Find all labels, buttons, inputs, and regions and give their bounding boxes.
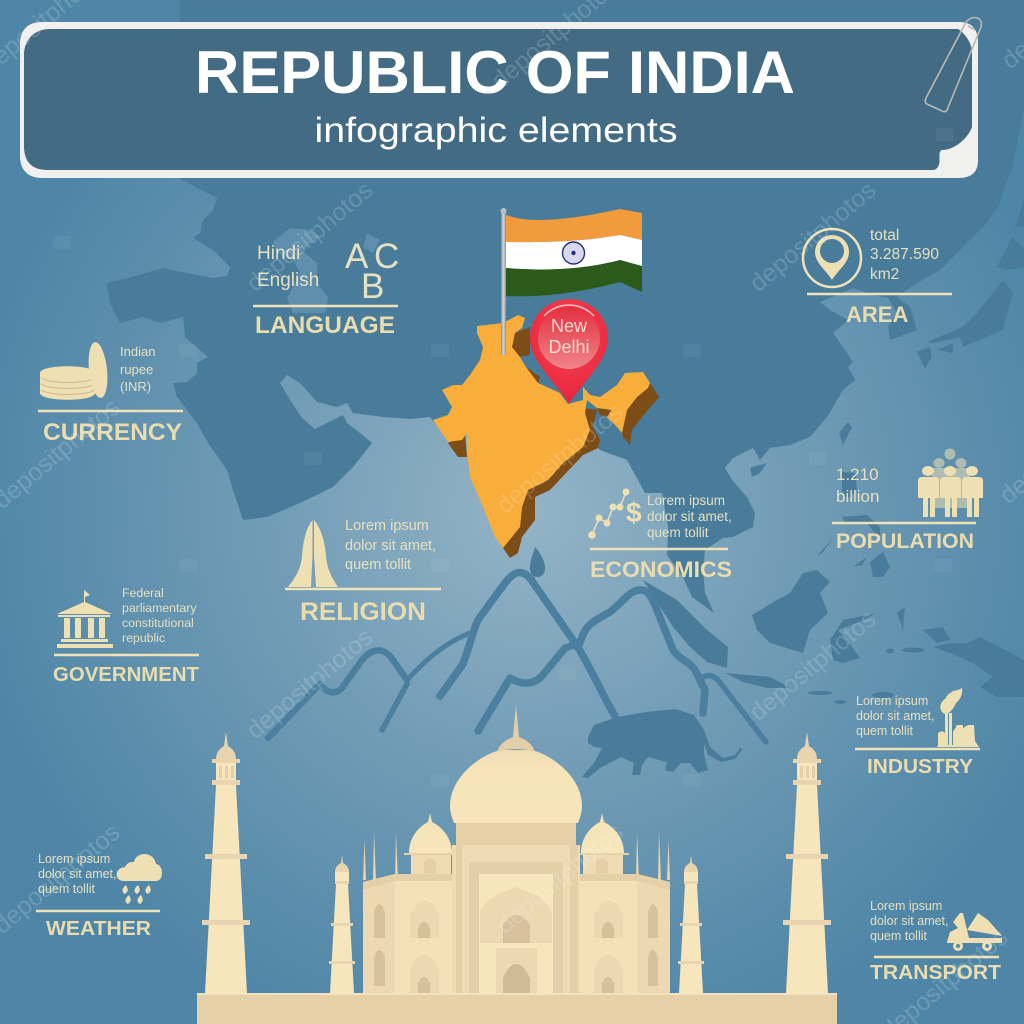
Sulawesi	[830, 613, 877, 663]
spires	[363, 832, 670, 880]
icon: parliament building	[57, 590, 113, 648]
currency block	[38, 341, 183, 446]
weather block: WEATHER	[46, 918, 152, 940]
Taj Mahal	[197, 705, 837, 1024]
government block: constitutional	[122, 616, 194, 630]
watermarks: depositphotos	[241, 623, 378, 745]
pin: New Delhi	[530, 299, 608, 404]
camera watermark marks	[53, 128, 954, 787]
Japan	[917, 200, 1024, 368]
industry block	[855, 688, 980, 778]
currency block: CURRENCY	[43, 419, 182, 446]
population block: 1.210	[836, 465, 879, 484]
area block	[803, 227, 952, 327]
transport block: quem tollit	[870, 929, 927, 943]
east coast relief	[503, 408, 600, 558]
population block: POPULATION	[836, 530, 974, 553]
weather block	[36, 852, 162, 940]
area block: AREA	[846, 302, 908, 327]
government block	[53, 586, 199, 686]
economics block: Lorem ipsum	[647, 493, 725, 508]
economics block	[588, 488, 732, 582]
icon: dump truck	[947, 913, 1002, 951]
language block: C	[374, 237, 399, 276]
watermarks: depositphotos	[491, 398, 628, 520]
large minaret left	[202, 732, 250, 993]
language block: Hindi	[257, 243, 300, 264]
transport block: Lorem ipsum	[870, 899, 942, 913]
watermarks: depositphotos	[744, 176, 881, 298]
transport block: dolor sit amet,	[870, 914, 949, 928]
main dome	[450, 750, 582, 823]
icon: flag of India	[500, 208, 642, 355]
Taiwan and Hainan	[750, 422, 852, 477]
area block: total	[870, 227, 899, 244]
Himalaya relief	[511, 327, 540, 383]
watermarks: depositphotos	[744, 605, 881, 727]
weather block: quem tollit	[38, 882, 95, 896]
large minaret right	[783, 732, 831, 993]
pin: New Delhi: New	[551, 316, 588, 336]
population block: billion	[836, 487, 879, 506]
area block: km2	[870, 266, 899, 283]
arches	[410, 900, 623, 993]
mountains	[268, 573, 766, 742]
currency block: (INR)	[120, 379, 151, 394]
government block: GOVERNMENT	[53, 664, 199, 686]
icon: coins	[40, 341, 110, 400]
currency block: rupee	[120, 362, 153, 377]
industry block: dolor sit amet,	[856, 709, 935, 723]
industry block: Lorem ipsum	[856, 694, 928, 708]
north east relief	[597, 383, 659, 445]
icon: people	[918, 448, 983, 517]
banner title: REPUBLIC OF INDIA	[195, 39, 795, 106]
icon: rain cloud	[117, 854, 162, 904]
weather block: dolor sit amet,	[38, 867, 117, 881]
religion block: quem tollit	[345, 557, 411, 573]
Sri Lanka	[530, 547, 545, 577]
watermarks: depositphotos	[241, 176, 378, 298]
Borneo	[752, 570, 830, 653]
tiger	[582, 709, 742, 778]
banner	[20, 18, 981, 178]
Sumatra	[643, 580, 728, 668]
map body	[433, 315, 650, 548]
weather block: Lorem ipsum	[38, 852, 110, 866]
language block: A	[345, 237, 369, 276]
India map	[433, 315, 659, 558]
language block: English	[257, 270, 319, 291]
government block: Federal	[122, 586, 164, 600]
icon: location ring	[803, 229, 861, 287]
industry block: INDUSTRY	[867, 756, 974, 778]
icon: praying hands	[288, 520, 338, 587]
language block: LANGUAGE	[255, 312, 395, 339]
icon: paperclip	[925, 18, 981, 112]
language block	[253, 237, 399, 339]
religion block: dolor sit amet,	[345, 538, 436, 554]
base platform	[197, 993, 837, 1024]
religion block: RELIGION	[300, 598, 426, 626]
west gulf relief	[448, 433, 467, 457]
government block: republic	[122, 631, 165, 645]
small domes	[404, 813, 629, 875]
Java	[725, 673, 790, 688]
government block: parliamentary	[122, 601, 197, 615]
language block: B	[361, 267, 384, 306]
pin: New Delhi: Delhi	[548, 337, 590, 357]
transport block	[870, 899, 1002, 984]
economics block: dolor sit amet,	[647, 509, 732, 524]
currency block: Indian	[120, 344, 155, 359]
religion block: Lorem ipsum	[345, 518, 429, 534]
world map silhouette	[107, 0, 1024, 704]
inland seas	[273, 228, 380, 313]
icon: growth chart with dollar	[588, 488, 642, 539]
area block: 3.287.590	[870, 246, 939, 263]
banner subtitle: infographic elements	[314, 111, 678, 150]
economics block: ECONOMICS	[590, 557, 732, 582]
small minarets	[329, 855, 704, 993]
Philippines	[817, 472, 890, 577]
wings	[363, 874, 452, 993]
icon: growth chart with dollar: $	[626, 497, 642, 528]
small islands	[897, 607, 950, 643]
New Guinea	[933, 637, 1024, 697]
religion block	[285, 518, 441, 626]
economics block: quem tollit	[647, 525, 709, 540]
central facade	[452, 845, 580, 993]
watermarks: depositphotos	[491, 818, 628, 940]
icon: factory	[937, 688, 979, 747]
transport block: TRANSPORT	[870, 962, 1001, 984]
industry block: quem tollit	[856, 724, 913, 738]
population block	[832, 448, 983, 553]
